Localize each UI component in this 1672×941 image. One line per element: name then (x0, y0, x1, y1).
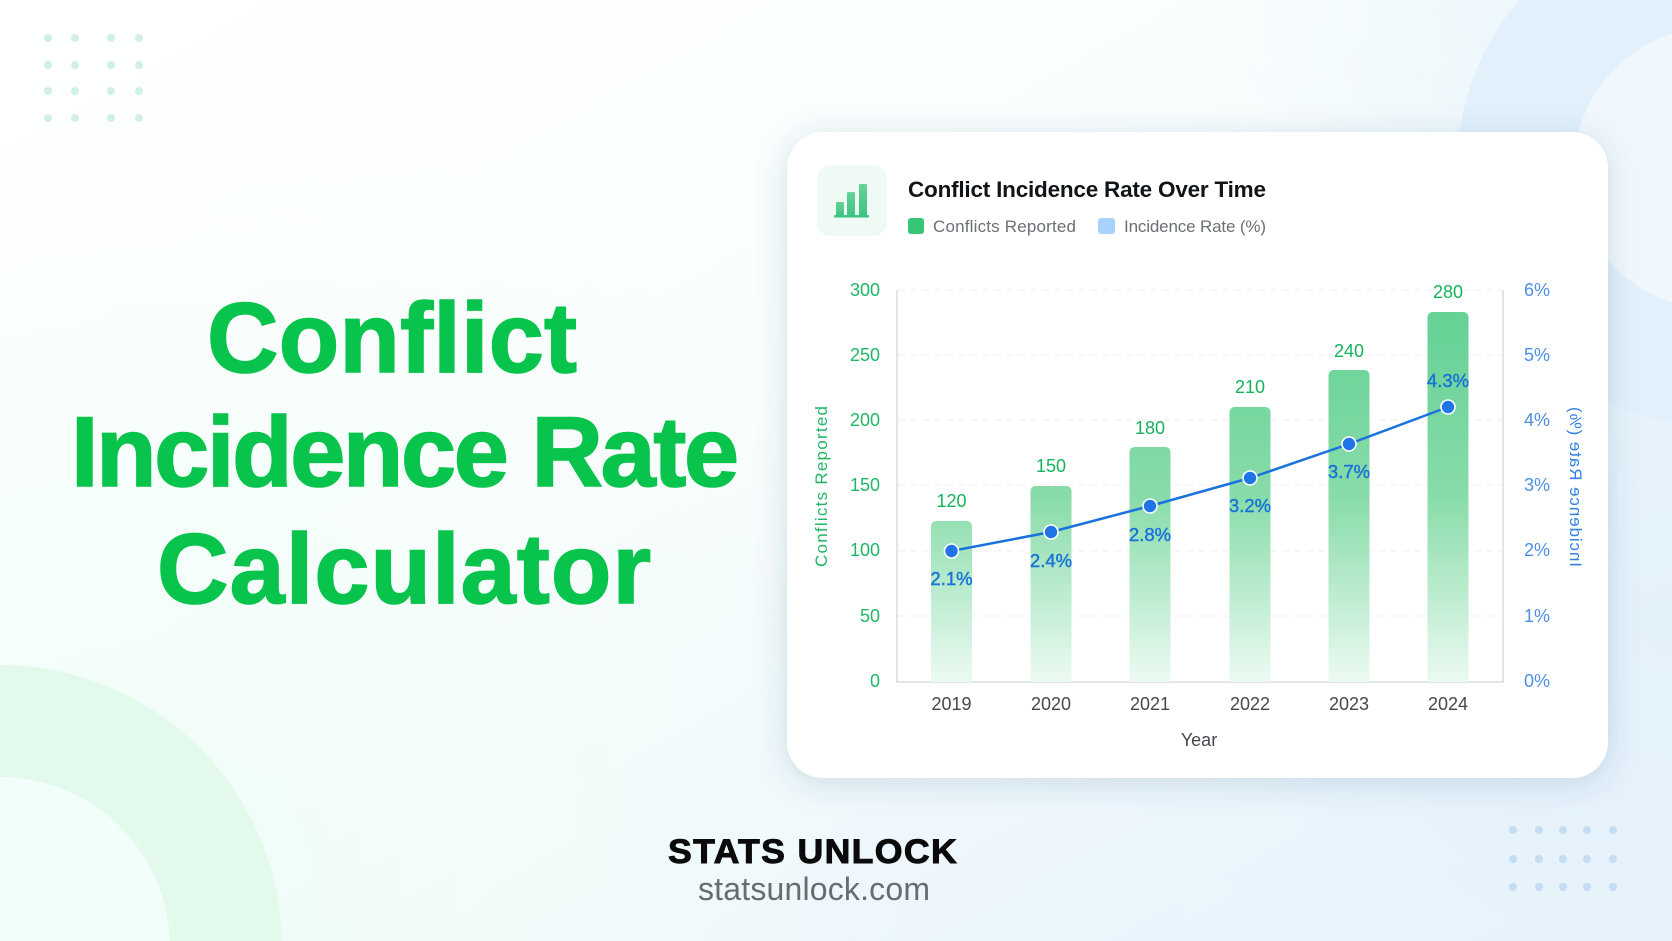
dot pattern: bottom right (1509, 826, 1617, 891)
left axis ticks: 250 (850, 345, 880, 365)
rate value labels: 3.2% (1229, 495, 1271, 516)
bar value labels: 180 (1135, 418, 1165, 438)
decorative ring: bottom left (0, 665, 282, 941)
right axis ticks: 5% (1524, 345, 1550, 365)
x axis years: 2020 (1031, 694, 1071, 714)
legend item: conflicts reported: Conflicts Reported (933, 217, 1076, 236)
right axis ticks: 1% (1524, 606, 1550, 626)
x axis years (931, 694, 1468, 714)
decorative ring: top right (1457, 0, 1672, 422)
combo chart (812, 280, 1585, 750)
x axis years: 2023 (1329, 694, 1369, 714)
brand name: STATS UNLOCK (668, 833, 957, 871)
right axis title: Incidence Rate (%) (1566, 407, 1585, 567)
right axis ticks: 4% (1524, 410, 1550, 430)
bar value labels: 120 (936, 491, 967, 511)
x axis years: 2021 (1130, 694, 1170, 714)
legend (908, 217, 1266, 236)
rate value labels: 3.7% (1328, 461, 1370, 482)
bar value labels: 210 (1235, 377, 1265, 397)
left axis ticks: 50 (860, 606, 880, 626)
main title: Incidence Rate (71, 396, 739, 507)
icon: bar chart (817, 165, 887, 236)
x axis title: Year (1181, 730, 1217, 750)
right axis ticks: 3% (1524, 475, 1550, 495)
rate value labels (930, 370, 1469, 589)
bar value labels: 150 (1036, 456, 1066, 476)
left axis title: Conflicts Reported (812, 406, 831, 567)
bars (931, 312, 1468, 682)
bar value labels: 240 (1334, 341, 1364, 361)
brand url: statsunlock.com (698, 871, 930, 907)
bar value labels: 280 (1433, 282, 1463, 302)
legend item: incidence rate: Incidence Rate (%) (1124, 217, 1266, 236)
chart heading: Conflict Incidence Rate Over Time (908, 177, 1266, 202)
incidence rate line (952, 407, 1448, 551)
main title: Conflict (207, 282, 577, 393)
right axis ticks: 6% (1524, 280, 1550, 300)
left axis ticks: 200 (850, 410, 880, 430)
line markers (944, 400, 1455, 558)
rate value labels: 2.4% (1030, 550, 1072, 571)
right axis ticks (1524, 280, 1550, 691)
right axis ticks: 2% (1524, 540, 1550, 560)
bar value labels (936, 282, 1463, 511)
x axis years: 2022 (1230, 694, 1270, 714)
left axis ticks: 0 (870, 671, 880, 691)
x axis years: 2024 (1428, 694, 1468, 714)
rate value labels: 2.8% (1129, 524, 1171, 545)
panel: chart card (787, 132, 1608, 778)
x axis years: 2019 (931, 694, 972, 714)
left axis ticks: 100 (850, 540, 880, 560)
main title: Calculator (157, 513, 651, 624)
rate value labels: 4.3% (1427, 370, 1469, 391)
left axis ticks: 300 (850, 280, 880, 300)
left axis ticks: 150 (850, 475, 880, 495)
main title (71, 282, 739, 624)
dot pattern: top left (44, 34, 143, 122)
left axis ticks (850, 280, 880, 691)
rate value labels: 2.1% (930, 568, 973, 589)
right axis ticks: 0% (1524, 671, 1550, 691)
